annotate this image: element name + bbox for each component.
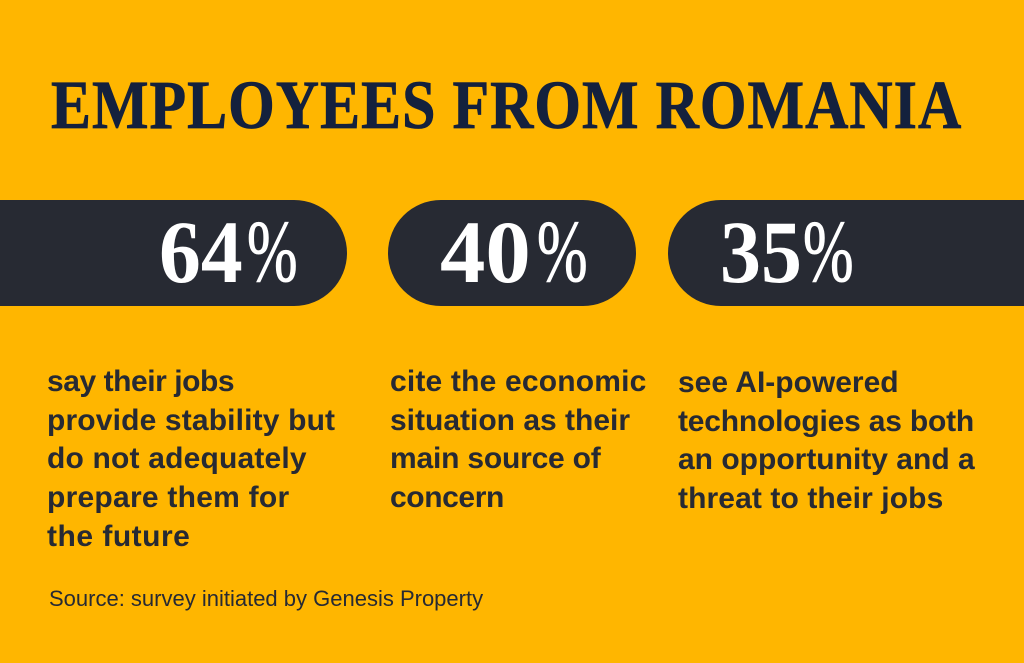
stat: 40% (440, 204, 588, 302)
text block: 64% description (47, 365, 335, 553)
text block: 35% description: threat to their jobs (678, 482, 943, 515)
text block: 64% description: do not adequately (47, 442, 307, 475)
stat: 64%: 64 (159, 204, 243, 302)
stat: 40%: % (537, 204, 588, 301)
panel: 64% pill (0, 200, 347, 306)
stat: 64%: % (247, 204, 298, 301)
title: EMPLOYEES FROM ROMANIA (51, 67, 962, 143)
text block: 35% description: technologies as both (678, 405, 974, 438)
text block: 40% description: main source of (390, 442, 601, 475)
text block: 64% description: say their jobs (47, 365, 234, 398)
stat: 64% (159, 204, 298, 302)
text block: 35% description (678, 366, 975, 515)
text block: 40% description: concern (390, 481, 504, 514)
stat: 35% (720, 204, 854, 302)
text block: 64% description: prepare them for (47, 481, 289, 514)
stat: 35%: % (803, 204, 854, 301)
text block: 40% description: cite the economic (390, 365, 646, 398)
panel: 40% pill (388, 200, 636, 306)
text block: 64% description: provide stability but (47, 404, 335, 437)
source note: Source: survey initiated by Genesis Property (49, 586, 483, 611)
text block: 40% description (390, 365, 646, 514)
text block: 40% description: situation as their (390, 404, 630, 437)
text block: 35% description: an opportunity and a (678, 443, 975, 476)
stat: 40%: 40 (440, 204, 531, 302)
text block: 64% description: the future (47, 520, 190, 553)
stat: 35%: 35 (720, 204, 802, 302)
text block: 35% description: see AI-powered (678, 366, 899, 399)
panel: 35% pill (668, 200, 1024, 306)
